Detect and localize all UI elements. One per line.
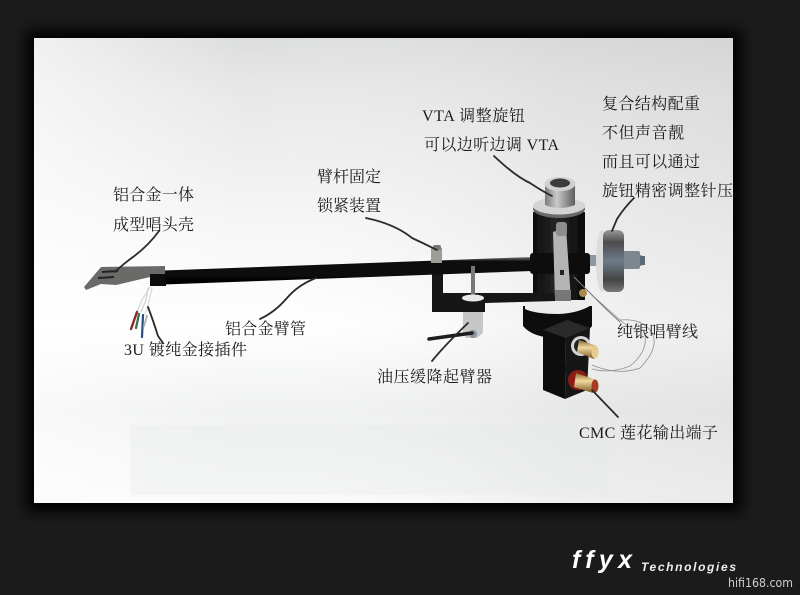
upper RCA connector	[571, 336, 598, 359]
leader: RCA output	[592, 390, 618, 417]
bracket	[432, 268, 556, 312]
counterweight shaft	[588, 251, 645, 269]
label: arm lock line 1: 臂杆固定	[317, 168, 381, 186]
logo	[572, 546, 736, 574]
leader: gold connectors	[148, 307, 163, 343]
leader: arm tube	[260, 278, 316, 319]
label: arm lock line 2: 锁紧装置	[317, 196, 381, 215]
headshell slots	[98, 271, 118, 278]
cartridge wires	[131, 287, 152, 337]
VTA flange	[533, 198, 585, 218]
terminal screw	[579, 289, 587, 297]
leader: VTA knob	[494, 156, 552, 196]
arm lock clamp	[431, 245, 442, 263]
label: cue lift: 油压缓降起臂器	[377, 368, 492, 386]
label: counterweight line 2: 不但声音靓	[602, 123, 684, 142]
panel: photo background	[34, 38, 733, 503]
base plinth	[523, 294, 593, 338]
leader: headshell	[115, 231, 159, 272]
logo wordmark: ffyx	[572, 546, 633, 574]
silver tonearm wire	[574, 277, 654, 371]
logo subtitle: Technologies	[641, 560, 736, 574]
headshell	[84, 266, 165, 290]
panel shadow	[26, 30, 742, 512]
tonearm photo	[84, 177, 654, 399]
label: silver wire: 纯银唱臂线	[617, 323, 698, 341]
thick arm section	[530, 253, 590, 274]
counterweight	[596, 230, 624, 292]
label: arm tube: 铝合金臂管	[225, 320, 306, 338]
VTA knob	[544, 177, 576, 208]
lower RCA connector	[568, 370, 598, 393]
callout labels	[113, 95, 733, 442]
pillar column	[533, 212, 585, 300]
label: RCA output: CMC 莲花输出端子	[579, 423, 718, 442]
label: counterweight line 3: 而且可以通过	[602, 153, 700, 171]
output box	[543, 320, 590, 399]
label: gold connectors: 3U 镀纯金接插件	[124, 340, 247, 359]
leader: silver wire	[574, 277, 620, 322]
label: headshell line 2: 成型唱头壳	[113, 216, 194, 234]
label: headshell line 1: 铝合金一体	[113, 186, 194, 204]
leader: counterweight	[612, 198, 634, 231]
silver arm clamp	[553, 222, 571, 301]
lift post	[462, 266, 484, 302]
leader lines	[115, 156, 634, 417]
label: counterweight line 4: 旋钮精密调整针压	[602, 181, 733, 200]
headshell collar	[150, 274, 166, 286]
leader: arm lock	[366, 218, 437, 250]
arm tube	[150, 257, 532, 285]
label: VTA line 1: VTA 调整旋钮	[422, 106, 525, 125]
leader: cue lift	[432, 323, 468, 361]
label: counterweight line 1: 复合结构配重	[602, 95, 700, 113]
watermark: hifi168.com	[728, 576, 793, 590]
cue lift body	[429, 312, 483, 339]
label: VTA line 2: 可以边听边调 VTA	[424, 136, 559, 154]
